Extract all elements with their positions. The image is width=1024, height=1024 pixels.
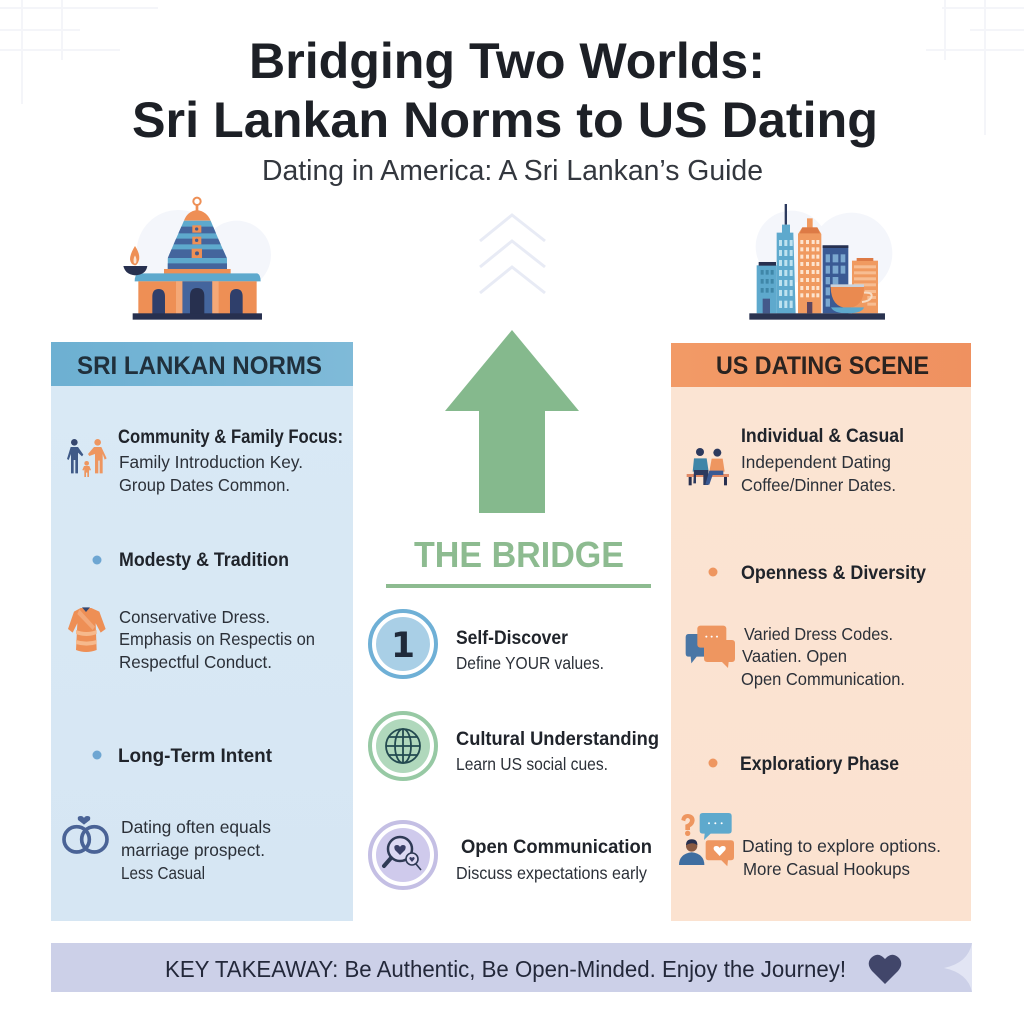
icon: traditional dress <box>68 607 106 652</box>
icon: family <box>67 439 107 477</box>
panel: sri lankan norms <box>51 342 353 921</box>
title: Sri Lankan Norms to US Dating <box>132 92 878 148</box>
modesty description: Respectful Conduct. <box>119 652 272 672</box>
badge: magnifier with heart <box>370 822 436 888</box>
openness description: Open Communication. <box>741 669 905 689</box>
icon: wedding rings <box>64 816 107 852</box>
bullet: modesty <box>92 556 102 564</box>
modesty heading: Modesty & Tradition <box>119 550 289 571</box>
bullet: exploratory <box>708 758 718 768</box>
individual and casual text: Independent Dating <box>741 452 891 472</box>
panel: us dating scene <box>671 343 971 921</box>
step 1: self-discover: Self-Discover <box>456 628 569 649</box>
openness description: Vaatien. Open <box>742 646 847 666</box>
community and family focus text: Community & Family Focus: <box>118 427 343 448</box>
step 2: cultural understanding <box>370 713 659 779</box>
badge: globe <box>370 713 436 779</box>
icon: question, chat and person <box>679 813 734 866</box>
openness description <box>741 624 905 689</box>
individual and casual text: Individual & Casual <box>741 426 904 447</box>
heading: the bridge: THE BRIDGE <box>414 534 624 575</box>
icon: city skyline <box>749 204 892 320</box>
step 1: self-discover <box>370 611 604 677</box>
panel header: us dating scene <box>671 343 971 387</box>
decorative upward chevrons <box>480 215 545 293</box>
modesty description: Conservative Dress. <box>119 607 270 627</box>
exploratory description: More Casual Hookups <box>743 859 910 879</box>
bullet: openness <box>708 568 718 576</box>
key takeaway banner: KEY TAKEAWAY: Be Authentic, Be Open-Minded. Enjoy the Journey! <box>165 956 846 982</box>
subtitle: Dating in America: A Sri Lankan’s Guide <box>262 155 763 187</box>
long-term description <box>121 817 271 883</box>
exploratory description: Dating to explore options. <box>742 836 941 856</box>
panel header: us dating scene: US DATING SCENE <box>716 352 929 380</box>
badge: number 1 <box>370 611 436 677</box>
icon: heart <box>869 955 901 984</box>
icon: couple on bench <box>687 448 729 485</box>
exploratory heading: Exploratiory Phase <box>740 754 899 775</box>
step 3: open communication <box>370 822 652 888</box>
long-term description: marriage prospect. <box>121 840 265 860</box>
badge: number 1: 1 <box>391 626 415 666</box>
step 1: self-discover: Define YOUR values. <box>456 653 604 673</box>
individual and casual text: Coffee/Dinner Dates. <box>741 475 896 495</box>
icon: temple <box>123 198 271 320</box>
panel header: sri lankan norms <box>51 342 353 386</box>
openness description: Varied Dress Codes. <box>744 624 893 644</box>
long-term heading: Long-Term Intent <box>118 746 273 767</box>
title <box>132 33 878 148</box>
community and family focus text <box>118 427 343 495</box>
title: Bridging Two Worlds: <box>249 33 765 89</box>
key takeaway banner <box>51 943 972 992</box>
step 3: open communication: Discuss expectations early <box>456 863 647 883</box>
step 2: cultural understanding: Learn US social cues. <box>456 754 608 774</box>
bullet: long-term <box>92 750 102 760</box>
community and family focus text: Family Introduction Key. <box>119 452 303 472</box>
modesty description <box>119 607 315 672</box>
long-term description: Less Casual <box>121 863 205 883</box>
openness heading: Openness & Diversity <box>741 563 926 584</box>
step 2: cultural understanding: Cultural Understanding <box>456 729 659 750</box>
community and family focus text: Group Dates Common. <box>119 475 290 495</box>
arrow: green bridge arrow <box>445 330 579 513</box>
exploratory description <box>742 836 941 879</box>
long-term description: Dating often equals <box>121 817 271 837</box>
modesty description: Emphasis on Respectis on <box>119 629 315 649</box>
individual and casual text <box>741 426 904 495</box>
step 3: open communication: Open Communication <box>461 837 652 858</box>
panel header: sri lankan norms: SRI LANKAN NORMS <box>77 352 322 380</box>
icon: chat bubbles <box>686 626 735 668</box>
